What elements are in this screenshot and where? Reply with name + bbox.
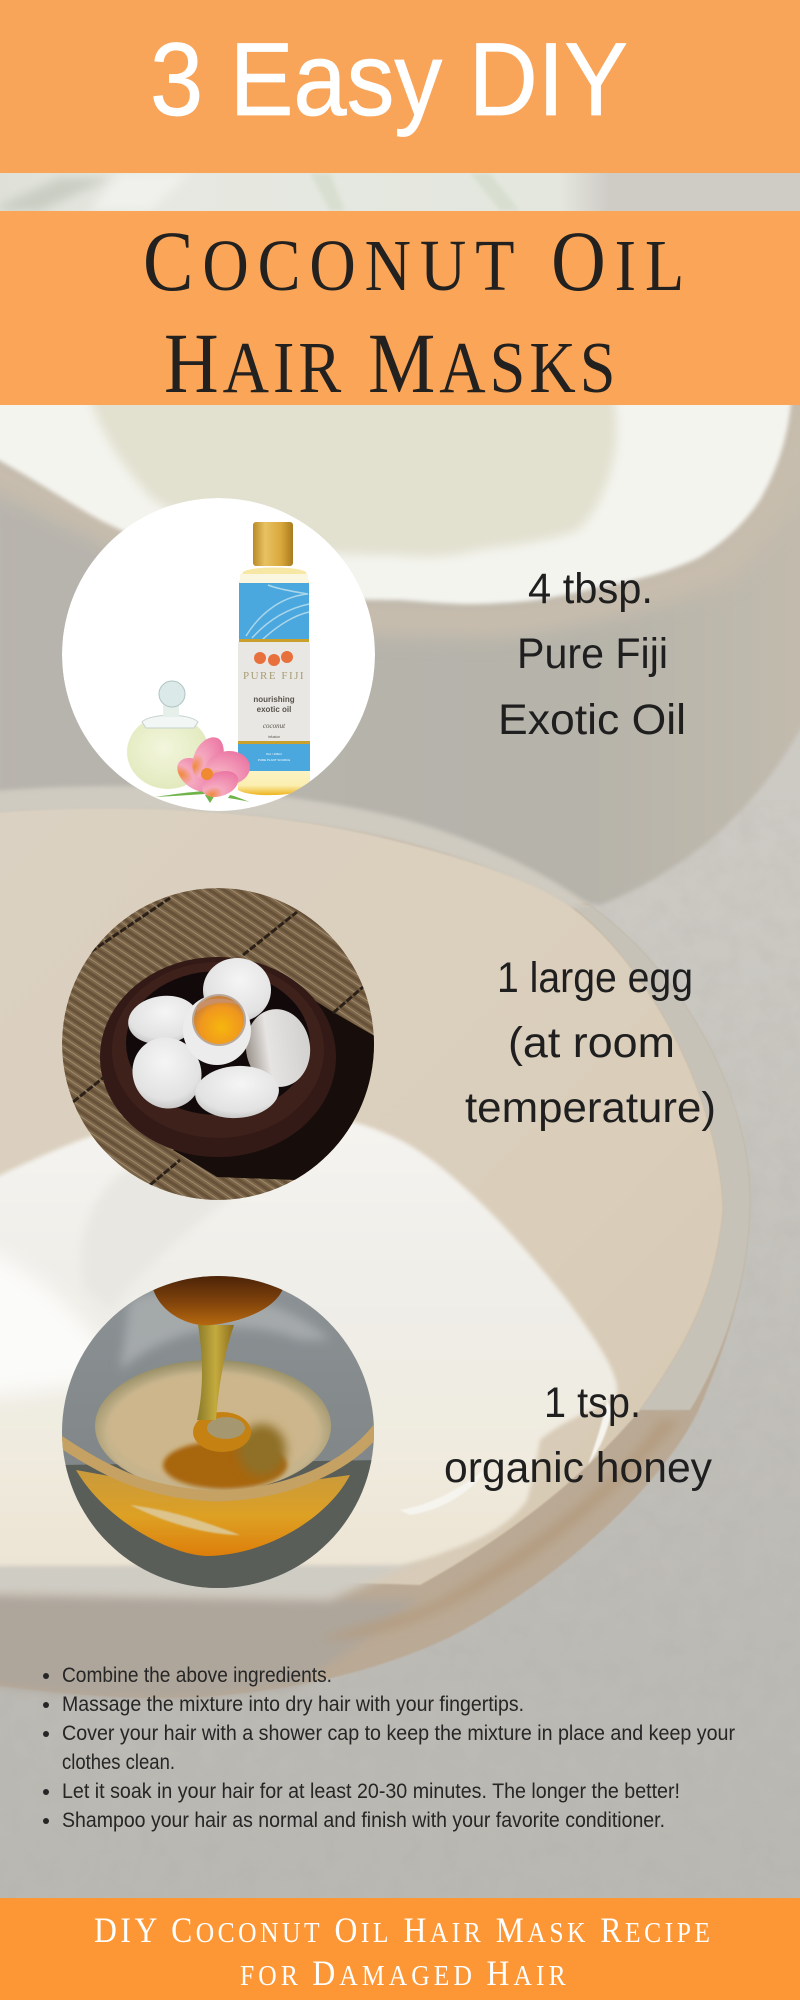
ingredient text: honey: organic honey (444, 1444, 712, 1492)
bottle label text (243, 670, 305, 762)
instructions list: Let it soak in your hair for at least 20-30 minutes. The longer the better! (62, 1780, 680, 1803)
honey swirl (193, 1412, 251, 1452)
lower coconut dark left base (0, 1592, 420, 1698)
ingredient photo: Pure Fiji oil (62, 498, 375, 811)
bullets (43, 1673, 49, 1824)
white sliver on cream (400, 1400, 612, 1515)
ingredient text: Pure Fiji oil: Exotic Oil (498, 696, 686, 744)
instructions list: Combine the above ingredients. (62, 1664, 332, 1687)
title: 3 Easy DIY: 3 Easy DIY (150, 22, 628, 138)
footer orange band (0, 1898, 800, 2000)
wooden bowl (100, 957, 336, 1157)
cream highlight folds (0, 1240, 130, 1400)
bottle label text: nourishing (253, 695, 295, 704)
ingredient text: Pure Fiji oil (498, 565, 686, 744)
mat bindings (73, 898, 363, 1185)
heading: Coconut Oil Hair Masks (143, 214, 684, 411)
lower coconut pale top rim (0, 786, 590, 908)
bottle label text: exotic oil (257, 705, 291, 714)
instructions list: clothes clean. (62, 1751, 175, 1774)
upper coconut fibre rim (0, 400, 800, 620)
ingredient photo: honey pouring into glass bowl (58, 1274, 380, 1600)
footer text: FOR DAMAGED HAIR (240, 1954, 566, 1993)
amber glass bowl base (76, 1470, 350, 1556)
icon: leaf and flower (155, 732, 251, 803)
bottle label text: PURE PLANT SOURCE (258, 758, 290, 762)
bottle label flowers (254, 651, 293, 666)
instructions list: Shampoo your hair as normal and finish with your favorite conditioner. (62, 1809, 665, 1832)
ingredient text: egg (465, 954, 716, 1132)
ingredient text: Pure Fiji oil: 4 tbsp. (528, 565, 653, 613)
ingredient text: egg: temperature) (465, 1084, 716, 1132)
bottle label text: 8oz / 236ml (266, 752, 282, 756)
top orange band (0, 0, 800, 173)
honey stream (197, 1325, 234, 1420)
honey liquid in bowl (95, 1360, 331, 1492)
coconut shell interior (0, 809, 723, 1585)
icon: glass jar (127, 681, 209, 789)
bottle label text: PURE FIJI (243, 670, 305, 682)
upper coconut shell (0, 400, 800, 905)
white coconut cream (0, 1108, 617, 1566)
instructions list: Massage the mixture into dry hair with your fingertips. (62, 1693, 524, 1716)
strip of palm leaves between the bands (0, 150, 800, 220)
inner cream dome shading (81, 1150, 300, 1310)
honey pool (163, 1441, 287, 1489)
icon: bottle (238, 522, 310, 795)
table shadow (173, 1001, 374, 1180)
heading line 1: COCONUT OIL (143, 214, 684, 309)
ingredient photo: eggs in bowl (62, 888, 400, 1200)
ingredient text: honey: 1 tsp. (544, 1379, 641, 1427)
coconut centre meat (87, 390, 617, 557)
bottle label text: infusion (268, 735, 280, 739)
ingredient text: egg: 1 large egg (497, 954, 693, 1002)
grey band below cream (0, 1560, 420, 1600)
second orange band (0, 211, 800, 405)
footer text (94, 1911, 710, 1993)
heading line 2: HAIR MASKS (164, 316, 615, 411)
wooden spoon (153, 1275, 283, 1325)
glass rim (58, 1428, 378, 1496)
lower rim brown fibre (320, 1420, 680, 1640)
eggs (120, 958, 315, 1121)
ingredient text: egg: (at room (508, 1019, 675, 1067)
instructions list: Cover your hair with a shower cap to keep the mixture in place and keep your (62, 1722, 735, 1745)
lower coconut grey right rim (570, 905, 750, 1410)
lower coconut outer shell (0, 790, 750, 1698)
table below bowl (66, 1460, 372, 1588)
bottle label text: coconut (263, 722, 286, 730)
ingredient text: honey (444, 1379, 712, 1492)
instructions list (43, 1664, 735, 1832)
cracked egg (183, 994, 251, 1065)
coconut white flesh (0, 390, 792, 604)
ingredient text: Pure Fiji oil: Pure Fiji (517, 630, 668, 678)
footer text: DIY COCONUT OIL HAIR MASK RECIPE (94, 1911, 710, 1950)
